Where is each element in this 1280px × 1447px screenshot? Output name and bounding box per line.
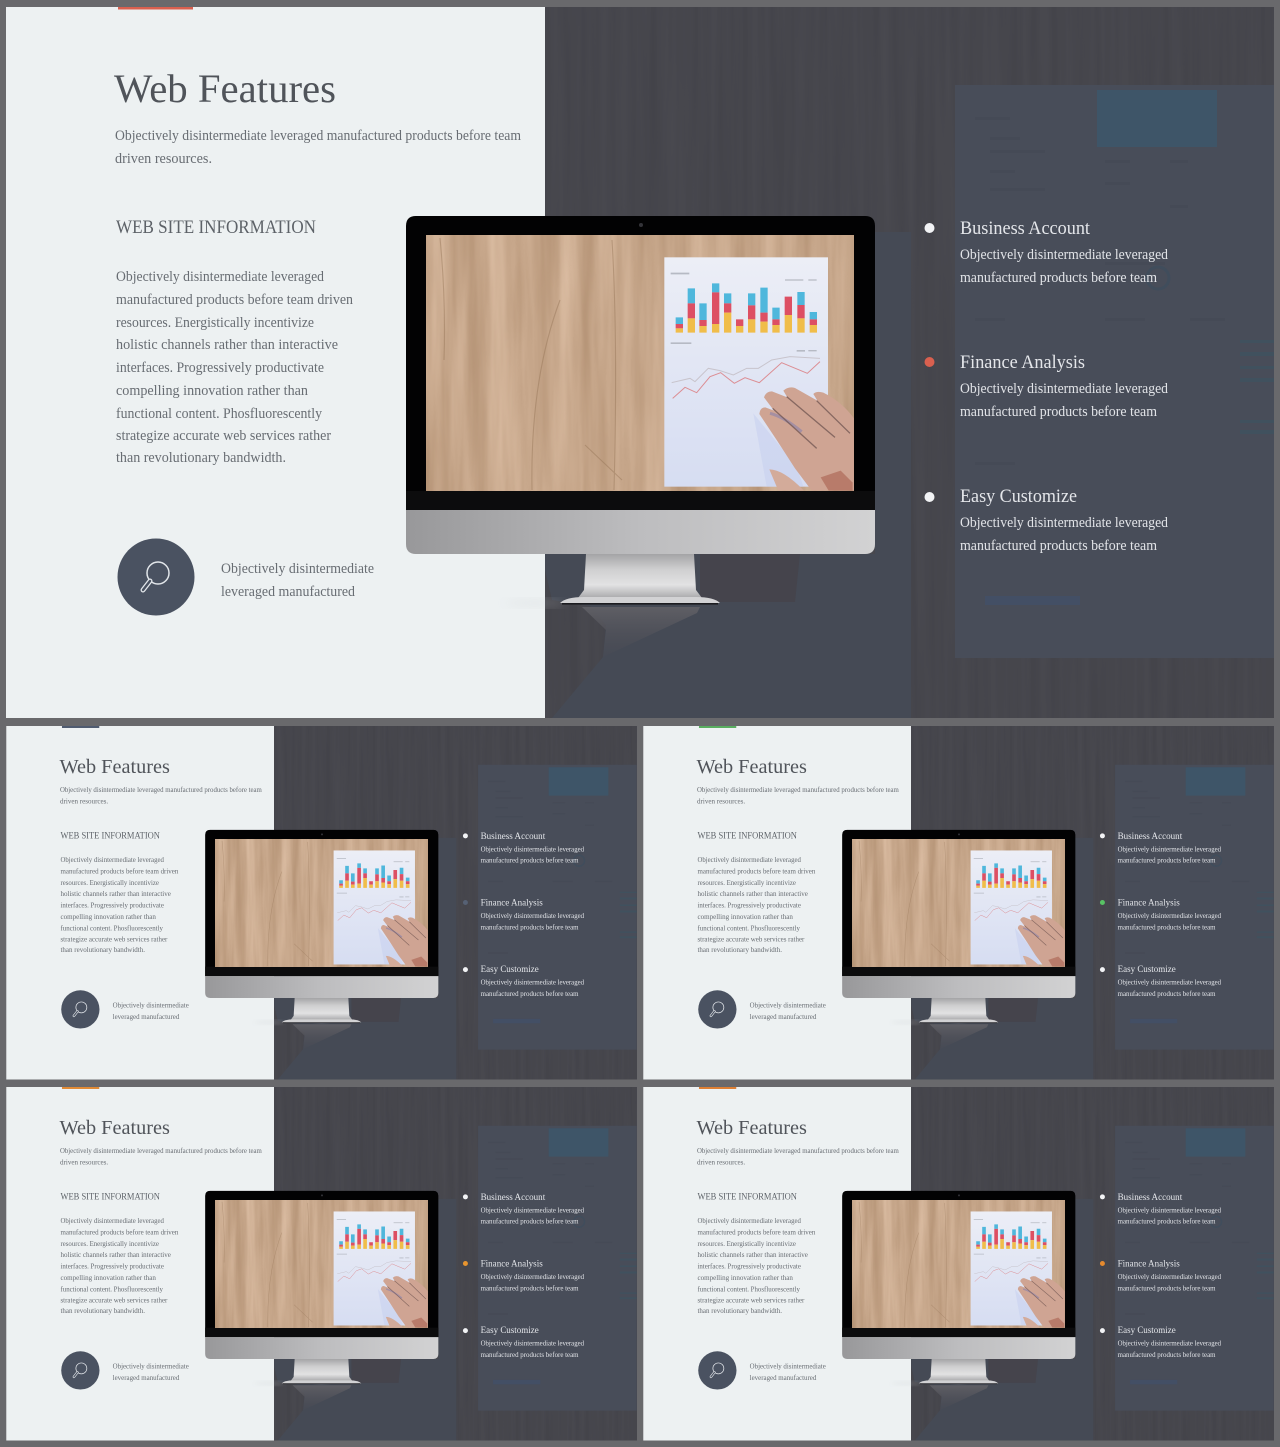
- top accent bar: [62, 1087, 99, 1089]
- feature: easy customize: manufactured products before team: [481, 1350, 579, 1359]
- subtitle: driven resources.: [60, 797, 108, 806]
- paragraph: strategize accurate web services rather: [60, 934, 168, 943]
- feature: easy customize: [1100, 1326, 1221, 1359]
- monitor with chart photo: [842, 830, 1075, 1049]
- feature: business account: Business Account: [481, 1193, 546, 1203]
- subtitle: [60, 1146, 262, 1167]
- icon caption: Objectively disintermediate: [221, 561, 374, 577]
- paragraph: strategize accurate web services rather: [116, 428, 331, 444]
- icon caption: Objectively disintermediate: [113, 1000, 189, 1009]
- top accent bar: [118, 7, 193, 10]
- monitor with chart photo: [406, 216, 875, 657]
- title: Web Features: [696, 1117, 807, 1139]
- feature: finance analysis: Objectively disintermediate leveraged: [481, 911, 584, 920]
- paragraph: holistic channels rather than interactive: [697, 889, 809, 898]
- paragraph: functional content. Phosfluorescently: [60, 923, 163, 932]
- left light panel: [6, 726, 274, 1080]
- slide 3: green accent: [643, 726, 1274, 1080]
- feature: finance analysis: manufactured products before team: [1118, 922, 1216, 931]
- monitor with chart photo: [842, 1191, 1075, 1410]
- paragraph: than revolutionary bandwidth.: [60, 1306, 145, 1315]
- icon caption: [113, 1000, 189, 1021]
- feature: business account: [924, 218, 1168, 286]
- paragraph: compelling innovation rather than: [697, 912, 793, 921]
- feature: business account: [463, 832, 584, 865]
- paragraph: functional content. Phosfluorescently: [697, 1284, 800, 1293]
- icon caption: leveraged manufactured: [750, 1012, 817, 1021]
- feature: finance analysis: manufactured products before team: [481, 922, 579, 931]
- feature: easy customize: [463, 965, 584, 998]
- feature: finance analysis: Objectively disintermediate leveraged: [1118, 1272, 1221, 1281]
- left light panel: [6, 1087, 274, 1440]
- feature: easy customize: Objectively disintermediate leveraged: [1118, 1339, 1221, 1348]
- feature: easy customize: Easy Customize: [481, 1326, 539, 1336]
- feature: business account: manufactured products before team: [481, 856, 579, 865]
- title: Web Features: [696, 756, 807, 778]
- paragraph: manufactured products before team driven: [60, 867, 179, 876]
- feature: finance analysis: Objectively disintermediate leveraged: [1118, 911, 1221, 920]
- subtitle: [697, 1146, 899, 1167]
- paragraph: [697, 855, 816, 954]
- paragraph: holistic channels rather than interactive: [697, 1250, 809, 1259]
- feature: finance analysis: Objectively disintermediate leveraged: [481, 1272, 584, 1281]
- subtitle: [60, 785, 262, 806]
- title: Web Features: [114, 66, 336, 111]
- feature: finance analysis: manufactured products before team: [481, 1283, 579, 1292]
- feature: finance analysis: [924, 352, 1168, 420]
- feature: finance analysis: [1100, 1259, 1221, 1292]
- monitor with chart photo: [205, 830, 438, 1049]
- feature: business account: [1100, 1193, 1221, 1226]
- feature: easy customize: Easy Customize: [481, 965, 539, 975]
- feature: business account: manufactured products before team: [1118, 1217, 1216, 1226]
- subtitle: [697, 785, 899, 806]
- paragraph: than revolutionary bandwidth.: [697, 945, 782, 954]
- paragraph: resources. Energistically incentivize: [60, 878, 160, 887]
- paragraph: compelling innovation rather than: [116, 383, 308, 399]
- section heading: WEB SITE INFORMATION: [60, 1192, 160, 1202]
- feature: business account: manufactured products before team: [960, 270, 1157, 286]
- paragraph: compelling innovation rather than: [60, 1273, 156, 1282]
- icon caption: leveraged manufactured: [750, 1373, 817, 1382]
- subtitle: driven resources.: [697, 1158, 745, 1167]
- top accent bar: [62, 726, 99, 728]
- feature: business account: Business Account: [960, 218, 1091, 239]
- feature: business account: Business Account: [1118, 832, 1183, 842]
- top accent bar: [699, 726, 736, 728]
- icon: magnifier: [118, 538, 194, 616]
- paragraph: manufactured products before team driven: [697, 867, 816, 876]
- feature: finance analysis: Finance Analysis: [960, 352, 1085, 373]
- paragraph: interfaces. Progressively productivate: [60, 1261, 165, 1270]
- slide 5: deep orange accent: [643, 1087, 1274, 1440]
- icon caption: leveraged manufactured: [113, 1012, 180, 1021]
- paragraph: [116, 269, 353, 466]
- paragraph: interfaces. Progressively productivate: [697, 1261, 802, 1270]
- paragraph: than revolutionary bandwidth.: [60, 945, 145, 954]
- feature: business account: Objectively disintermediate leveraged: [1118, 844, 1221, 853]
- left light panel: [6, 7, 545, 718]
- subtitle: driven resources.: [697, 797, 745, 806]
- paragraph: holistic channels rather than interactive: [60, 889, 172, 898]
- left light panel: [643, 726, 911, 1080]
- dark wood background: [274, 726, 637, 1080]
- icon caption: [750, 1361, 826, 1382]
- paragraph: Objectively disintermediate leveraged: [60, 1216, 164, 1225]
- paragraph: [60, 1216, 179, 1315]
- feature: finance analysis: [463, 1259, 584, 1292]
- feature: easy customize: manufactured products before team: [960, 538, 1157, 554]
- paragraph: holistic channels rather than interactive: [60, 1250, 172, 1259]
- subtitle: [115, 128, 521, 167]
- feature: finance analysis: Finance Analysis: [481, 898, 543, 908]
- icon: magnifier: [61, 990, 100, 1029]
- paragraph: [60, 855, 179, 954]
- dark wood background: [911, 726, 1274, 1080]
- paragraph: compelling innovation rather than: [60, 912, 156, 921]
- paragraph: Objectively disintermediate leveraged: [697, 855, 801, 864]
- paragraph: than revolutionary bandwidth.: [116, 450, 286, 466]
- feature: business account: Business Account: [481, 832, 546, 842]
- top accent bar: [699, 1087, 736, 1089]
- icon caption: Objectively disintermediate: [750, 1361, 826, 1370]
- paragraph: manufactured products before team driven: [116, 292, 353, 308]
- section heading: WEB SITE INFORMATION: [116, 217, 316, 238]
- subtitle: Objectively disintermediate leveraged manufactured products before team: [697, 1146, 899, 1155]
- icon caption: [750, 1000, 826, 1021]
- subtitle: Objectively disintermediate leveraged manufactured products before team: [60, 1146, 262, 1155]
- monitor with chart photo: [205, 1191, 438, 1410]
- paragraph: interfaces. Progressively productivate: [697, 900, 802, 909]
- section heading: WEB SITE INFORMATION: [697, 1192, 797, 1202]
- paragraph: interfaces. Progressively productivate: [116, 360, 324, 376]
- feature: easy customize: [463, 1326, 584, 1359]
- feature: finance analysis: Finance Analysis: [1118, 1259, 1180, 1269]
- slide 4: orange accent: [6, 1087, 637, 1440]
- feature: easy customize: Objectively disintermediate leveraged: [481, 1339, 584, 1348]
- feature: easy customize: Easy Customize: [1118, 1326, 1176, 1336]
- icon: magnifier: [698, 1351, 737, 1390]
- left light panel: [643, 1087, 911, 1440]
- dark wood background: [274, 1087, 637, 1440]
- paragraph: Objectively disintermediate leveraged: [116, 269, 324, 285]
- icon: magnifier: [698, 990, 737, 1029]
- feature: finance analysis: [463, 898, 584, 931]
- subtitle: Objectively disintermediate leveraged manufactured products before team: [697, 785, 899, 794]
- feature: finance analysis: [1100, 898, 1221, 931]
- paragraph: resources. Energistically incentivize: [697, 878, 797, 887]
- feature: finance analysis: Objectively disintermediate leveraged: [960, 381, 1168, 397]
- icon caption: [113, 1361, 189, 1382]
- title: Web Features: [59, 756, 170, 778]
- feature: business account: Business Account: [1118, 1193, 1183, 1203]
- paragraph: holistic channels rather than interactive: [116, 337, 338, 353]
- dark wood background: [911, 1087, 1274, 1440]
- icon caption: Objectively disintermediate: [750, 1000, 826, 1009]
- icon caption: Objectively disintermediate: [113, 1361, 189, 1370]
- feature: business account: [1100, 832, 1221, 865]
- paragraph: strategize accurate web services rather: [697, 1295, 805, 1304]
- paragraph: compelling innovation rather than: [697, 1273, 793, 1282]
- section heading: WEB SITE INFORMATION: [697, 831, 797, 841]
- paragraph: interfaces. Progressively productivate: [60, 900, 165, 909]
- paragraph: functional content. Phosfluorescently: [697, 923, 800, 932]
- paragraph: functional content. Phosfluorescently: [116, 406, 322, 422]
- feature: easy customize: [924, 486, 1168, 554]
- feature: easy customize: manufactured products before team: [481, 989, 579, 998]
- icon: magnifier: [61, 1351, 100, 1390]
- slide 2: slate accent: [6, 726, 637, 1080]
- subtitle: Objectively disintermediate leveraged manufactured products before team: [115, 128, 521, 144]
- feature: finance analysis: manufactured products before team: [1118, 1283, 1216, 1292]
- feature: easy customize: Easy Customize: [1118, 965, 1176, 975]
- paragraph: resources. Energistically incentivize: [697, 1239, 797, 1248]
- paragraph: resources. Energistically incentivize: [60, 1239, 160, 1248]
- paragraph: manufactured products before team driven: [60, 1228, 179, 1237]
- feature: business account: Objectively disintermediate leveraged: [481, 1205, 584, 1214]
- subtitle: driven resources.: [115, 151, 212, 167]
- feature: easy customize: Objectively disintermediate leveraged: [481, 978, 584, 987]
- feature: business account: manufactured products before team: [481, 1217, 579, 1226]
- feature: business account: manufactured products before team: [1118, 856, 1216, 865]
- paragraph: than revolutionary bandwidth.: [697, 1306, 782, 1315]
- feature: business account: Objectively disintermediate leveraged: [1118, 1205, 1221, 1214]
- slide 1: large red accent: [6, 7, 1274, 718]
- subtitle: driven resources.: [60, 1158, 108, 1167]
- paragraph: [697, 1216, 816, 1315]
- paragraph: functional content. Phosfluorescently: [60, 1284, 163, 1293]
- feature: business account: Objectively disintermediate leveraged: [481, 844, 584, 853]
- feature: easy customize: Objectively disintermediate leveraged: [960, 515, 1168, 531]
- icon caption: leveraged manufactured: [221, 584, 355, 600]
- feature: easy customize: [1100, 965, 1221, 998]
- paragraph: Objectively disintermediate leveraged: [697, 1216, 801, 1225]
- subtitle: Objectively disintermediate leveraged manufactured products before team: [60, 785, 262, 794]
- paragraph: resources. Energistically incentivize: [116, 315, 314, 331]
- feature: easy customize: Objectively disintermediate leveraged: [1118, 978, 1221, 987]
- feature: easy customize: manufactured products before team: [1118, 989, 1216, 998]
- icon caption: leveraged manufactured: [113, 1373, 180, 1382]
- feature: business account: [463, 1193, 584, 1226]
- icon caption: [221, 561, 374, 600]
- feature: business account: Objectively disintermediate leveraged: [960, 247, 1168, 263]
- section heading: WEB SITE INFORMATION: [60, 831, 160, 841]
- feature: finance analysis: Finance Analysis: [481, 1259, 543, 1269]
- feature: finance analysis: Finance Analysis: [1118, 898, 1180, 908]
- feature: easy customize: manufactured products before team: [1118, 1350, 1216, 1359]
- paragraph: strategize accurate web services rather: [60, 1295, 168, 1304]
- feature: easy customize: Easy Customize: [960, 486, 1077, 507]
- paragraph: strategize accurate web services rather: [697, 934, 805, 943]
- title: Web Features: [59, 1117, 170, 1139]
- dark wood background: [545, 7, 1274, 718]
- paragraph: Objectively disintermediate leveraged: [60, 855, 164, 864]
- feature: finance analysis: manufactured products before team: [960, 404, 1157, 420]
- paragraph: manufactured products before team driven: [697, 1228, 816, 1237]
